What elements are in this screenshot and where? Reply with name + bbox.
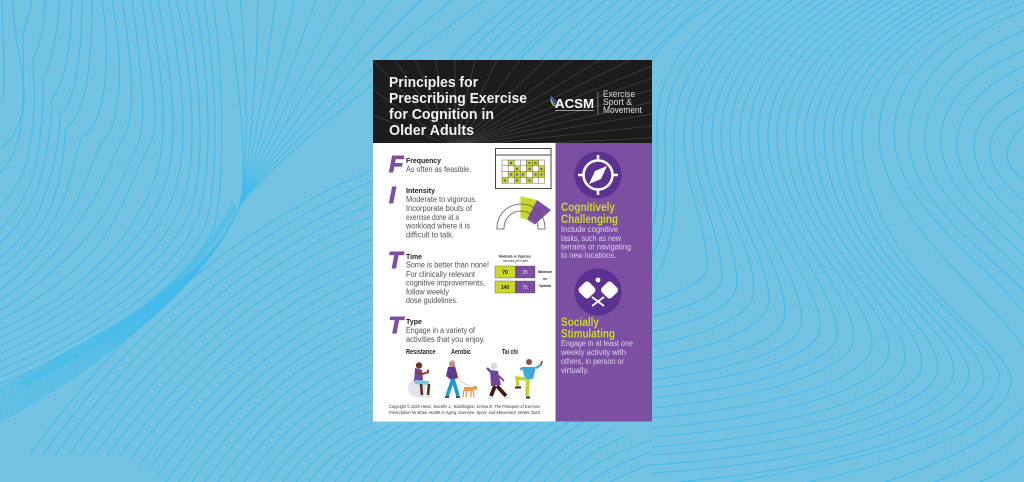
chart: weekly minutes table: Minimum	[538, 270, 552, 274]
poster card	[373, 60, 652, 422]
cognitively challenging text: tasks, such as new	[561, 234, 621, 243]
copyright note: Copyright © 2025 Heisz, Jennifer J.; Waddington, Emma E. The Principles of Exercise	[389, 404, 541, 409]
chart: weekly minutes table: 75	[522, 285, 528, 291]
illustration: tai chi man	[515, 359, 542, 398]
logo: Exercise Sport & Movement: Movement	[603, 105, 642, 115]
illustration: resistance exercise on ball	[408, 362, 431, 397]
panel: purple sidebar	[556, 143, 652, 422]
type block: Resistance	[406, 347, 436, 356]
icon: pickleball paddles	[574, 268, 622, 316]
socially stimulating text: others, in person or	[561, 357, 624, 366]
frequency block: Frequency	[406, 156, 442, 165]
type block: Engage in a variety of	[406, 326, 476, 335]
logo: Exercise Sport & Movement: Exercise	[603, 89, 635, 99]
intensity block: Intensity	[406, 186, 436, 195]
time block: For clinically relevant	[406, 270, 476, 279]
logo: ACSM: ACSM	[555, 97, 594, 111]
panel: black header	[373, 60, 652, 147]
time block: Some is better than none!	[406, 260, 489, 270]
type block: Type	[406, 317, 422, 326]
frequency block	[389, 151, 471, 177]
chart: weekly minutes table: 70	[502, 270, 508, 276]
socially stimulating text: weekly activity with	[560, 348, 626, 357]
intensity block: Moderate to vigorous.	[406, 195, 477, 204]
socially stimulating text	[560, 317, 633, 375]
frequency block: As often as feasible.	[406, 165, 471, 174]
title: Principles for	[389, 74, 478, 91]
intensity block: I	[389, 182, 396, 208]
title	[389, 74, 527, 139]
title: Older Adults	[389, 122, 474, 139]
icon: intensity gauge	[497, 196, 551, 229]
time block	[388, 247, 489, 305]
time block: dose guidelines.	[406, 296, 458, 305]
type block	[388, 312, 518, 356]
type block: activities that you enjoy.	[406, 335, 485, 344]
frequency block: F	[389, 151, 404, 177]
intensity block: Incorporate bouts of	[406, 204, 473, 213]
chart: weekly minutes table: Optimal	[539, 284, 551, 288]
time block: T	[388, 247, 404, 273]
intensity block	[389, 182, 477, 240]
illustration: walking a dog	[445, 361, 477, 397]
chart: weekly minutes table: vs	[543, 277, 547, 281]
socially stimulating text: Engage in at least one	[561, 339, 633, 348]
cognitively challenging text: Include cognitive	[561, 225, 619, 234]
logo: Exercise Sport & Movement: Sport &	[603, 97, 632, 107]
chart: weekly minutes table: minutes per week	[503, 259, 528, 263]
cognitively challenging text: to new locations.	[561, 251, 616, 260]
title: for Cognition in	[389, 106, 494, 123]
icon: compass	[574, 152, 622, 198]
chart: weekly minutes table: 140	[501, 285, 509, 291]
socially stimulating text: Socially	[561, 317, 600, 329]
logo: Exercise Sport & Movement	[598, 89, 642, 115]
copyright note: Prescription for Brain Health in Aging. Exercise, Sport, and Movement. Winter 2024	[389, 410, 541, 415]
chart: weekly minutes table	[495, 254, 552, 293]
intensity block: workload where it is	[405, 222, 470, 230]
cognitively challenging text: Cognitively	[561, 202, 616, 214]
copyright note	[389, 404, 541, 415]
chart: weekly minutes table: 35	[522, 270, 528, 276]
chart: weekly minutes table: Moderate or Vigorous	[499, 254, 531, 258]
time block: Time	[406, 252, 422, 261]
illustration: tai chi woman	[487, 363, 510, 398]
type block: Tai chi	[502, 347, 518, 356]
time block: follow weekly	[406, 288, 449, 296]
socially stimulating text: virtually.	[561, 366, 589, 375]
cognitively challenging text: Challenging	[561, 214, 618, 226]
intensity block: difficult to talk.	[406, 230, 454, 240]
type block: T	[388, 312, 404, 338]
socially stimulating text: Stimulating	[561, 328, 615, 340]
time block: cognitive improvements,	[406, 278, 485, 288]
title: Prescribing Exercise	[389, 90, 527, 107]
type block: Aerobic	[451, 347, 471, 356]
cognitively challenging text: terrains or navigating	[561, 242, 631, 252]
icon: calendar	[496, 148, 551, 188]
intensity block: exercise done at a	[406, 213, 459, 222]
cognitively challenging text	[561, 202, 631, 260]
